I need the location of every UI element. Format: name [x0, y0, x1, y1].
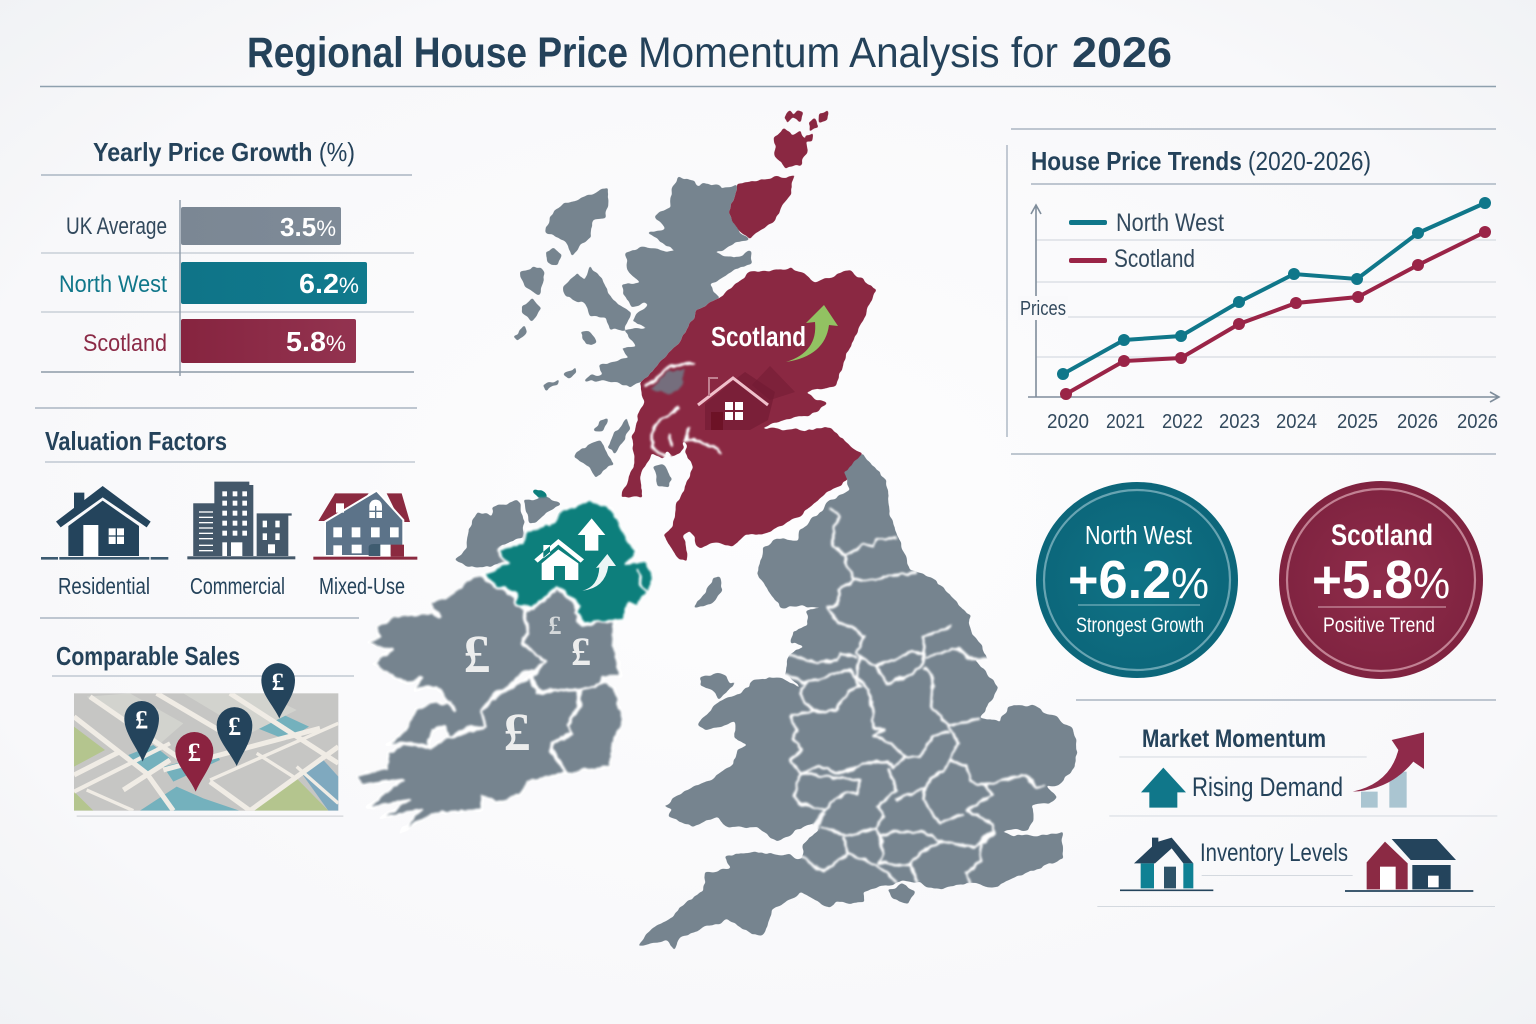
- map: Scotland highlighted region: [620, 109, 876, 560]
- title: 2026: [1072, 29, 1172, 77]
- pound symbols on Ireland: £: [571, 629, 591, 674]
- icon: commercial buildings: [187, 482, 295, 559]
- callout: North West badge: North West: [1085, 520, 1193, 550]
- icons: property types: [41, 482, 417, 560]
- pin: comparable 1: [124, 701, 159, 762]
- panel: yearly price growth: [41, 137, 414, 376]
- heading: market momentum: Market Momentum: [1142, 725, 1326, 753]
- icon: rising demand house arrow: [1141, 768, 1186, 808]
- label: commercial: Commercial: [190, 573, 285, 599]
- label: residential: Residential: [58, 573, 150, 599]
- bar: North West: North West: [59, 271, 167, 298]
- x-axis year labels: 2021: [1106, 411, 1145, 433]
- icon: house on Scotland: [698, 366, 795, 430]
- map: Scotland highlands and islands: [512, 177, 752, 488]
- callout: North West badge: [1036, 482, 1238, 678]
- panel: valuation factors: [35, 408, 417, 599]
- icon: mixed-use building: [313, 491, 417, 560]
- icon: inventory house right: [1345, 839, 1473, 891]
- bar: UK average: [66, 207, 341, 245]
- pin: comparable 1: £: [135, 705, 148, 734]
- x-axis year labels: 2022: [1162, 411, 1203, 433]
- map: Republic of Ireland regions: [355, 490, 653, 833]
- callout: Scotland badge: Positive Trend: [1323, 614, 1435, 637]
- pound symbols on Ireland: £: [548, 611, 562, 640]
- x-axis year labels: 2020: [1047, 411, 1089, 433]
- bar: Scotland: 5.8%: [286, 326, 346, 357]
- Scotland map label with icons: [698, 305, 838, 430]
- label: inventory levels: Inventory Levels: [1200, 839, 1348, 867]
- icon: inventory house left: [1120, 838, 1213, 890]
- x-axis year labels: 2023: [1219, 411, 1260, 433]
- line series: Scotland: [1060, 226, 1491, 400]
- x-axis year labels: 2026: [1397, 411, 1438, 433]
- panel: market momentum: [1076, 700, 1497, 907]
- bar: UK average: UK Average: [66, 213, 167, 240]
- legend: [1069, 209, 1224, 273]
- title: Regional House Price: [247, 29, 628, 77]
- x-axis year labels: 2026: [1457, 411, 1498, 433]
- icon: curved growth arrow: [582, 554, 616, 591]
- pin: comparable 3: [217, 707, 252, 766]
- Northern Ireland icons: [534, 518, 616, 591]
- pound symbols on Ireland: £: [504, 702, 530, 762]
- heading: valuation factors: Valuation Factors: [45, 426, 227, 456]
- chart grid and axes: [1018, 205, 1499, 402]
- pound symbols on Ireland: [464, 611, 591, 762]
- bar: Scotland: Scotland: [83, 330, 167, 357]
- callout: North West badge: Strongest Growth: [1076, 614, 1204, 637]
- panel: comparable sales: [40, 618, 359, 817]
- icon: residential house: [41, 486, 168, 558]
- label: Scotland: Scotland: [711, 321, 806, 352]
- map: England and Wales regions: [637, 455, 1078, 952]
- bar: UK average: 3.5%: [280, 212, 336, 242]
- pin: comparable 4: £: [272, 668, 284, 696]
- pin: comparable 2: [175, 732, 213, 792]
- icon: rising bars with arrow: [1353, 732, 1424, 808]
- pound symbols on Ireland: £: [464, 624, 490, 684]
- label: prices axis: Prices: [1020, 298, 1066, 320]
- x-axis year labels: 2025: [1337, 411, 1378, 433]
- heading: house price trends: House Price Trends (2020-2026): [1031, 146, 1371, 176]
- callout: Scotland badge: +5.8%: [1312, 550, 1450, 610]
- icon: house on Northern Ireland: [534, 539, 584, 580]
- x-axis year labels: [1047, 411, 1498, 433]
- icon: green growth arrow: [786, 305, 838, 362]
- legend: North West: [1116, 209, 1224, 237]
- title: Momentum Analysis for: [638, 29, 1058, 77]
- label: mixed-use: Mixed-Use: [319, 573, 405, 599]
- bar: North West: 6.2%: [299, 268, 359, 299]
- panel: house price trends chart: [1007, 129, 1499, 454]
- line series: North West: [1057, 197, 1491, 380]
- x-axis year labels: 2024: [1276, 411, 1317, 433]
- bar: North West: [59, 262, 367, 304]
- callout: Scotland badge: Scotland: [1331, 519, 1433, 552]
- pin: comparable 3: £: [228, 712, 241, 741]
- icon: up arrow: [578, 518, 605, 551]
- callout: North West badge: +6.2%: [1068, 550, 1209, 610]
- label: rising demand: Rising Demand: [1192, 772, 1343, 802]
- bar: Scotland: [83, 319, 356, 363]
- pin: comparable 2: £: [188, 737, 201, 767]
- pin: comparable 4: [261, 663, 295, 718]
- heading: yearly price growth: Yearly Price Growth (%): [93, 137, 355, 167]
- street map with price pins: [74, 663, 343, 817]
- callout: Scotland badge: [1279, 481, 1483, 679]
- heading: comparable sales: Comparable Sales: [56, 641, 240, 671]
- map of the UK and Ireland: [355, 109, 1078, 952]
- title: [40, 29, 1496, 86]
- legend: Scotland: [1114, 245, 1195, 273]
